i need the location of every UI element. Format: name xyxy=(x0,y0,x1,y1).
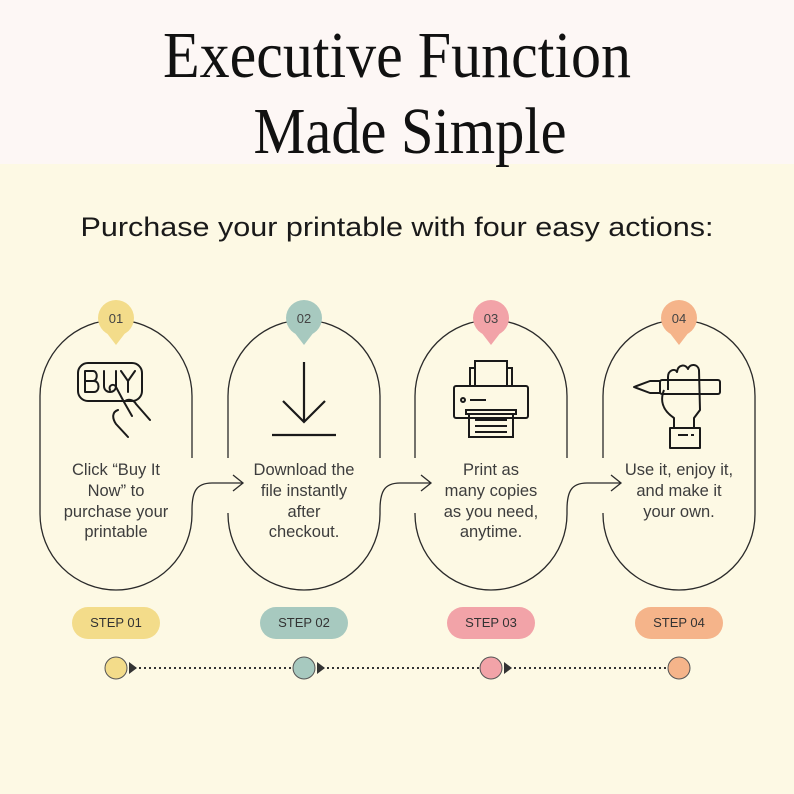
subtitle: Purchase your printable with four easy actions: xyxy=(80,212,714,242)
title xyxy=(163,19,631,168)
badge 01: 01 xyxy=(109,311,123,326)
step 2 text: file instantly xyxy=(261,482,348,500)
icon: printer xyxy=(454,361,528,437)
step 3 text: many copies xyxy=(445,482,537,500)
icon: download xyxy=(272,362,336,435)
step label pills: STEP 01 xyxy=(90,615,142,630)
badge 03: 03 xyxy=(484,311,498,326)
badge 03 xyxy=(473,300,509,345)
badge 01 xyxy=(98,300,134,345)
badge 04 xyxy=(661,300,697,345)
step 2 text: checkout. xyxy=(269,523,339,541)
step 1 text xyxy=(64,461,169,541)
badge 02: 02 xyxy=(297,311,311,326)
step pill outlines and connectors xyxy=(40,320,755,590)
badge 02 xyxy=(286,300,322,345)
step 4 text: Use it, enjoy it, xyxy=(625,461,733,479)
icon: buy button with hand xyxy=(78,363,150,437)
icon: hand with pen xyxy=(634,365,720,448)
step label pills: STEP 04 xyxy=(653,615,705,630)
step 2 text: after xyxy=(287,503,321,521)
title: Made Simple xyxy=(254,95,566,168)
step label pills xyxy=(72,607,723,639)
step 1 text: printable xyxy=(84,523,148,541)
badge 04: 04 xyxy=(672,311,686,326)
title: Executive Function xyxy=(163,19,631,92)
step label pills: STEP 03 xyxy=(465,615,517,630)
step 1 text: purchase your xyxy=(64,503,169,521)
step 2 text xyxy=(254,461,354,541)
step 1 text: Click “Buy It xyxy=(72,461,160,479)
step 2 text: Download the xyxy=(254,461,354,479)
step label pills: STEP 02 xyxy=(278,615,330,630)
step 3 text xyxy=(444,461,538,541)
timeline xyxy=(105,657,690,679)
step 4 text: and make it xyxy=(636,482,722,500)
step 4 text xyxy=(625,461,733,521)
step 1 text: Now” to xyxy=(88,482,144,500)
step 3 text: Print as xyxy=(463,461,519,479)
step 4 text: your own. xyxy=(643,503,715,521)
step 3 text: as you need, xyxy=(444,503,538,521)
step 3 text: anytime. xyxy=(460,523,522,541)
